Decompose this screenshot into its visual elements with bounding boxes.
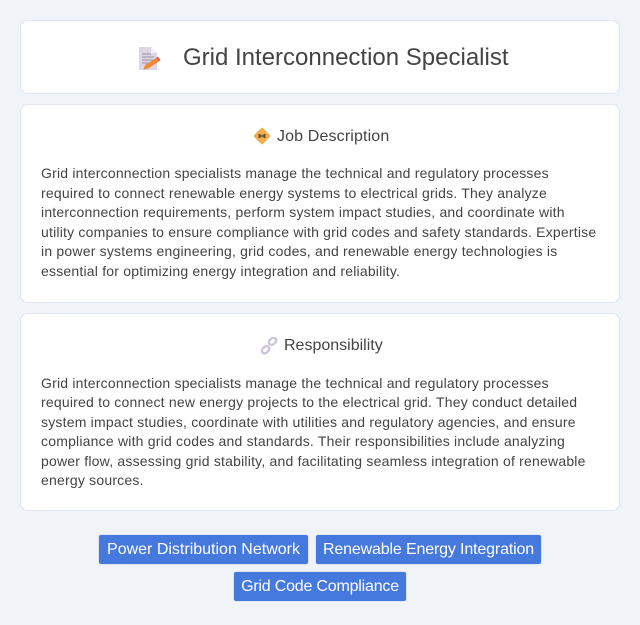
title: Grid Interconnection Specialist: [183, 44, 508, 71]
text block: job description: essential for optimizing energy integration and reliability.: [41, 263, 400, 279]
tag: grid code compliance: Grid Code Compliance: [241, 578, 399, 595]
tag: renewable energy integration: [315, 534, 542, 565]
text block: job description: in power systems engineering, grid codes, and renewable energy technologies is: [41, 243, 557, 259]
text block: responsibility: compliance with grid codes and standards. Their responsibilities include analyzing: [41, 433, 565, 449]
panel: job description: [20, 104, 620, 303]
text block: responsibility: required to connect new energy projects to the electrical grid. They conduct detailed: [41, 394, 577, 410]
icon: construction diamond: [254, 128, 270, 144]
text block: responsibility: system impact studies, coordinate with utilities and regulatory agencies, and ensure: [41, 414, 576, 430]
panel: title card: [20, 20, 620, 94]
tag: power distribution network: Power Distribution Network: [107, 541, 300, 558]
text block: job description: interconnection requirements, perform system impact studies, and coordinate with: [41, 204, 565, 220]
text block: job description: [41, 165, 596, 279]
tag: power distribution network: [98, 534, 309, 565]
text block: job description: Grid interconnection specialists manage the technical and regulatory processes: [41, 165, 549, 181]
panel: responsibility: [20, 313, 620, 511]
icon: document with pencil: [139, 47, 160, 70]
heading: job description: Job Description: [277, 128, 389, 145]
tag: renewable energy integration: Renewable Energy Integration: [323, 541, 534, 558]
text block: responsibility: power flow, assessing grid stability, and facilitating seamless integration of renewable: [41, 452, 586, 468]
tag: grid code compliance: [233, 571, 407, 602]
text block: job description: utility companies to ensure compliance with grid codes and safety standards. Expertise: [41, 224, 596, 240]
text block: responsibility: energy sources.: [41, 472, 144, 488]
text block: responsibility: Grid interconnection specialists manage the technical and regulatory processes: [41, 374, 549, 390]
heading: responsibility: Responsibility: [284, 337, 383, 354]
text block: job description: required to connect renewable energy systems to electrical grids. They analyze: [41, 185, 547, 201]
text block: responsibility: [41, 374, 586, 488]
icon: chain link: [260, 337, 278, 355]
